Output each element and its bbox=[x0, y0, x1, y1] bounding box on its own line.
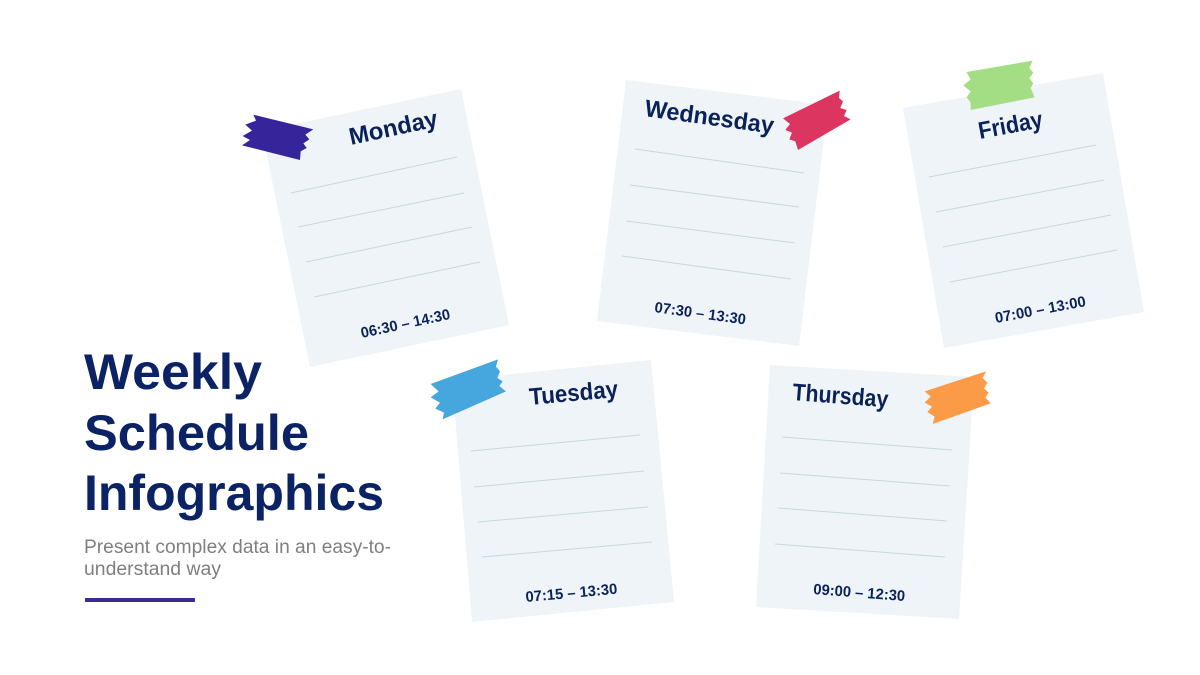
heading: Schedule bbox=[84, 405, 309, 461]
Monday hours: 06:30 – 14:30 bbox=[359, 306, 452, 342]
subtitle: understand way bbox=[84, 559, 221, 580]
Wednesday tape bbox=[783, 91, 851, 150]
heading: Infographics bbox=[84, 465, 384, 521]
Friday ruled lines bbox=[929, 145, 1117, 282]
Thursday tape bbox=[925, 371, 991, 424]
Wednesday paper bbox=[597, 80, 828, 346]
subtitle bbox=[84, 537, 391, 580]
Thursday hours: 09:00 – 12:30 bbox=[813, 581, 906, 605]
subtitle: Present complex data in an easy-to- bbox=[84, 537, 391, 558]
panel: Friday note bbox=[903, 61, 1144, 348]
Wednesday ruled lines bbox=[622, 149, 804, 279]
Friday tape bbox=[963, 61, 1035, 110]
Tuesday ruled lines bbox=[471, 435, 652, 557]
panel: Thursday note bbox=[756, 365, 991, 619]
Friday paper bbox=[903, 73, 1144, 348]
panel: Tuesday note bbox=[431, 359, 674, 622]
heading bbox=[84, 344, 384, 521]
Monday ruled lines bbox=[291, 157, 480, 297]
Tuesday hours: 07:15 – 13:30 bbox=[525, 581, 618, 606]
Thursday heading: Thursday bbox=[792, 379, 890, 413]
Thursday ruled lines bbox=[775, 437, 952, 557]
title block bbox=[84, 344, 391, 602]
Tuesday heading: Tuesday bbox=[528, 376, 620, 411]
panel: Monday note bbox=[242, 89, 509, 367]
Friday heading: Friday bbox=[976, 106, 1046, 145]
Wednesday heading: Wednesday bbox=[643, 95, 776, 140]
panel: Wednesday note bbox=[597, 80, 851, 346]
Thursday paper bbox=[756, 365, 974, 619]
Wednesday hours: 07:30 – 13:30 bbox=[653, 299, 747, 328]
Tuesday tape bbox=[431, 359, 506, 419]
heading: Weekly bbox=[84, 344, 262, 400]
accent underline bbox=[85, 598, 195, 602]
Monday heading: Monday bbox=[347, 105, 441, 151]
Tuesday paper bbox=[452, 360, 674, 622]
Friday hours: 07:00 – 13:00 bbox=[994, 293, 1087, 327]
Monday paper bbox=[262, 89, 509, 367]
Monday tape bbox=[242, 115, 313, 160]
